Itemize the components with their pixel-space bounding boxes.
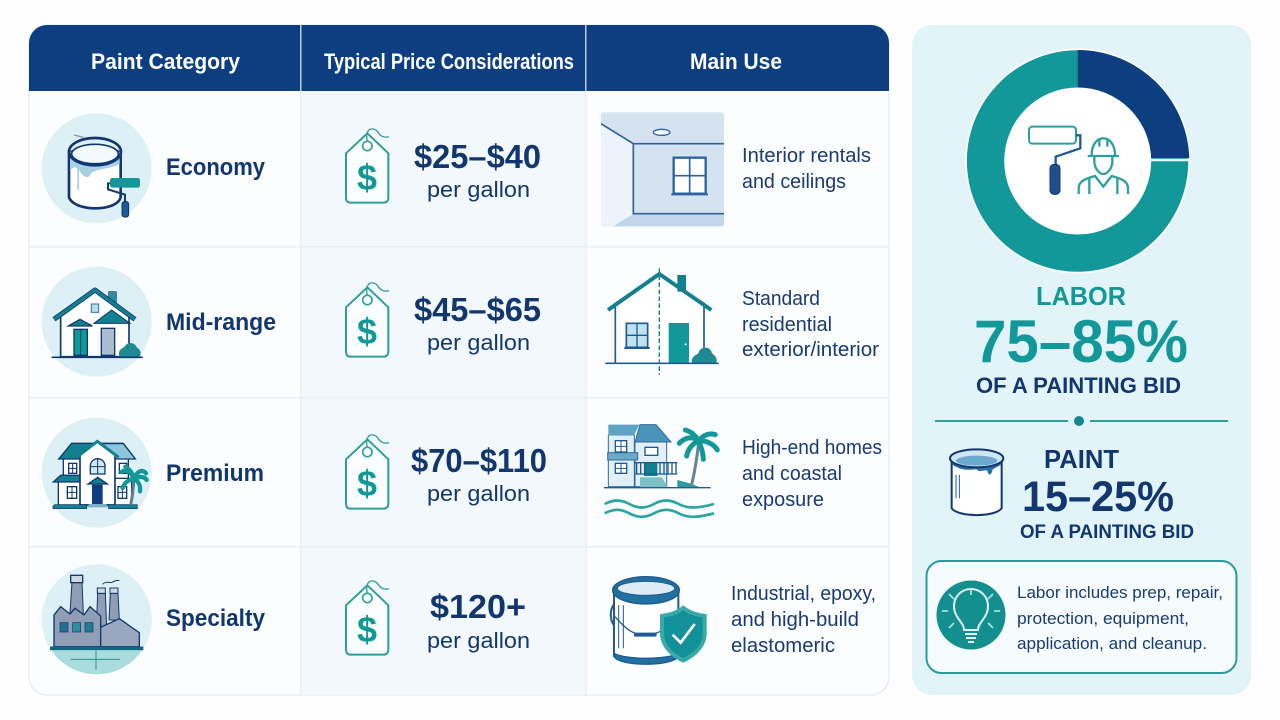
heading: typical price considerations: Typical Price Considerations [324,49,574,74]
price: $120+ per gallon [427,588,530,653]
price: $25–$40 per gallon [414,138,541,202]
row: economy [42,112,871,226]
text: labor includes note [1017,583,1223,653]
stat: labor 75–85%: 75–85% [974,308,1188,375]
text: industrial, epoxy, and high-build elastomeric: Industrial, epoxy, [731,583,876,605]
icon: suburban house [42,267,152,377]
icon: price tag: $ [357,463,377,504]
price: $70–$110 per gallon: $70–$110 [411,442,547,479]
icon: price tag [346,435,389,509]
icon: painter with hard hat [1079,138,1128,194]
icon: paint roller [1029,127,1080,194]
text: standard residential exterior/interior: Standard [742,288,820,310]
callout: what labor includes [926,561,1236,673]
icon: paint can with shield [611,577,707,664]
price: $120+ per gallon: per gallon [427,628,530,653]
heading: paint category: Paint Category [91,49,241,74]
price: $120+ per gallon: $120+ [430,588,526,625]
text: standard residential exterior/interior [742,288,879,361]
icon: price tag [346,581,389,655]
text: industrial, epoxy, and high-build elastomeric: elastomeric [731,635,835,657]
stat: labor 75–85% [974,281,1188,398]
icon: interior room [601,112,724,226]
icon: split house [605,268,719,375]
row: premium [42,418,882,528]
text: standard residential exterior/interior: exterior/interior [742,339,879,361]
text: high-end homes and coastal exposure [742,437,882,511]
row: specialty [40,564,876,678]
price: $45–$65 per gallon [414,291,541,355]
panel: labor and paint share of a bid [912,25,1251,695]
label: mid-range: Mid-range [166,309,276,336]
icon: price tag: $ [357,311,377,352]
stat: paint 15–25%: PAINT [1044,444,1119,474]
icon: large home with palm [42,418,152,528]
chart: labor versus paint donut [965,48,1191,274]
text: high-end homes and coastal exposure: High-end homes [742,437,882,459]
label: specialty: Specialty [166,605,266,632]
heading: main use: Main Use [690,49,782,74]
text: labor includes note: application, and cleanup. [1017,634,1207,653]
icon: coastal home [604,425,717,517]
price: $70–$110 per gallon [411,442,547,506]
text: high-end homes and coastal exposure: exposure [742,489,824,511]
icon: factory [40,564,153,678]
stat: paint 15–25%: OF A PAINTING BID [1020,522,1194,543]
row: mid-range [42,267,879,377]
text: interior rentals and ceilings: and ceilings [742,171,846,193]
icon: price tag [346,129,389,203]
text: industrial, epoxy, and high-build elastomeric: and high-build [731,609,859,631]
text: interior rentals and ceilings: Interior rentals [742,145,871,167]
stat: labor 75–85%: OF A PAINTING BID [976,373,1181,398]
icon: price tag: $ [357,157,377,198]
icon: paint can [950,449,1003,515]
icon: price tag [346,283,389,357]
stat: paint 15–25% [1020,444,1194,543]
text: interior rentals and ceilings [742,145,871,193]
text: standard residential exterior/interior: residential [742,314,832,336]
stat: labor 75–85%: LABOR [1036,281,1126,311]
price: $25–$40 per gallon: per gallon [427,177,530,202]
text: labor includes note: Labor includes prep, repair, [1017,583,1223,602]
label: economy: Economy [166,154,266,181]
icon: price tag: $ [357,609,377,650]
table header row [91,49,782,74]
text: labor includes note: protection, equipment, [1017,609,1189,628]
panel: paint category table [29,25,889,695]
price: $45–$65 per gallon: per gallon [427,330,530,355]
icon: paint bucket and roller [42,113,152,223]
icon: light bulb [936,580,1006,650]
text: high-end homes and coastal exposure: and coastal [742,463,842,485]
stat: paint 15–25%: 15–25% [1022,473,1174,521]
label: premium: Premium [166,460,264,487]
price: $70–$110 per gallon: per gallon [427,481,530,506]
price: $25–$40 per gallon: $25–$40 [414,138,541,175]
price: $45–$65 per gallon: $45–$65 [414,291,541,328]
text: industrial, epoxy, and high-build elastomeric [731,583,876,657]
